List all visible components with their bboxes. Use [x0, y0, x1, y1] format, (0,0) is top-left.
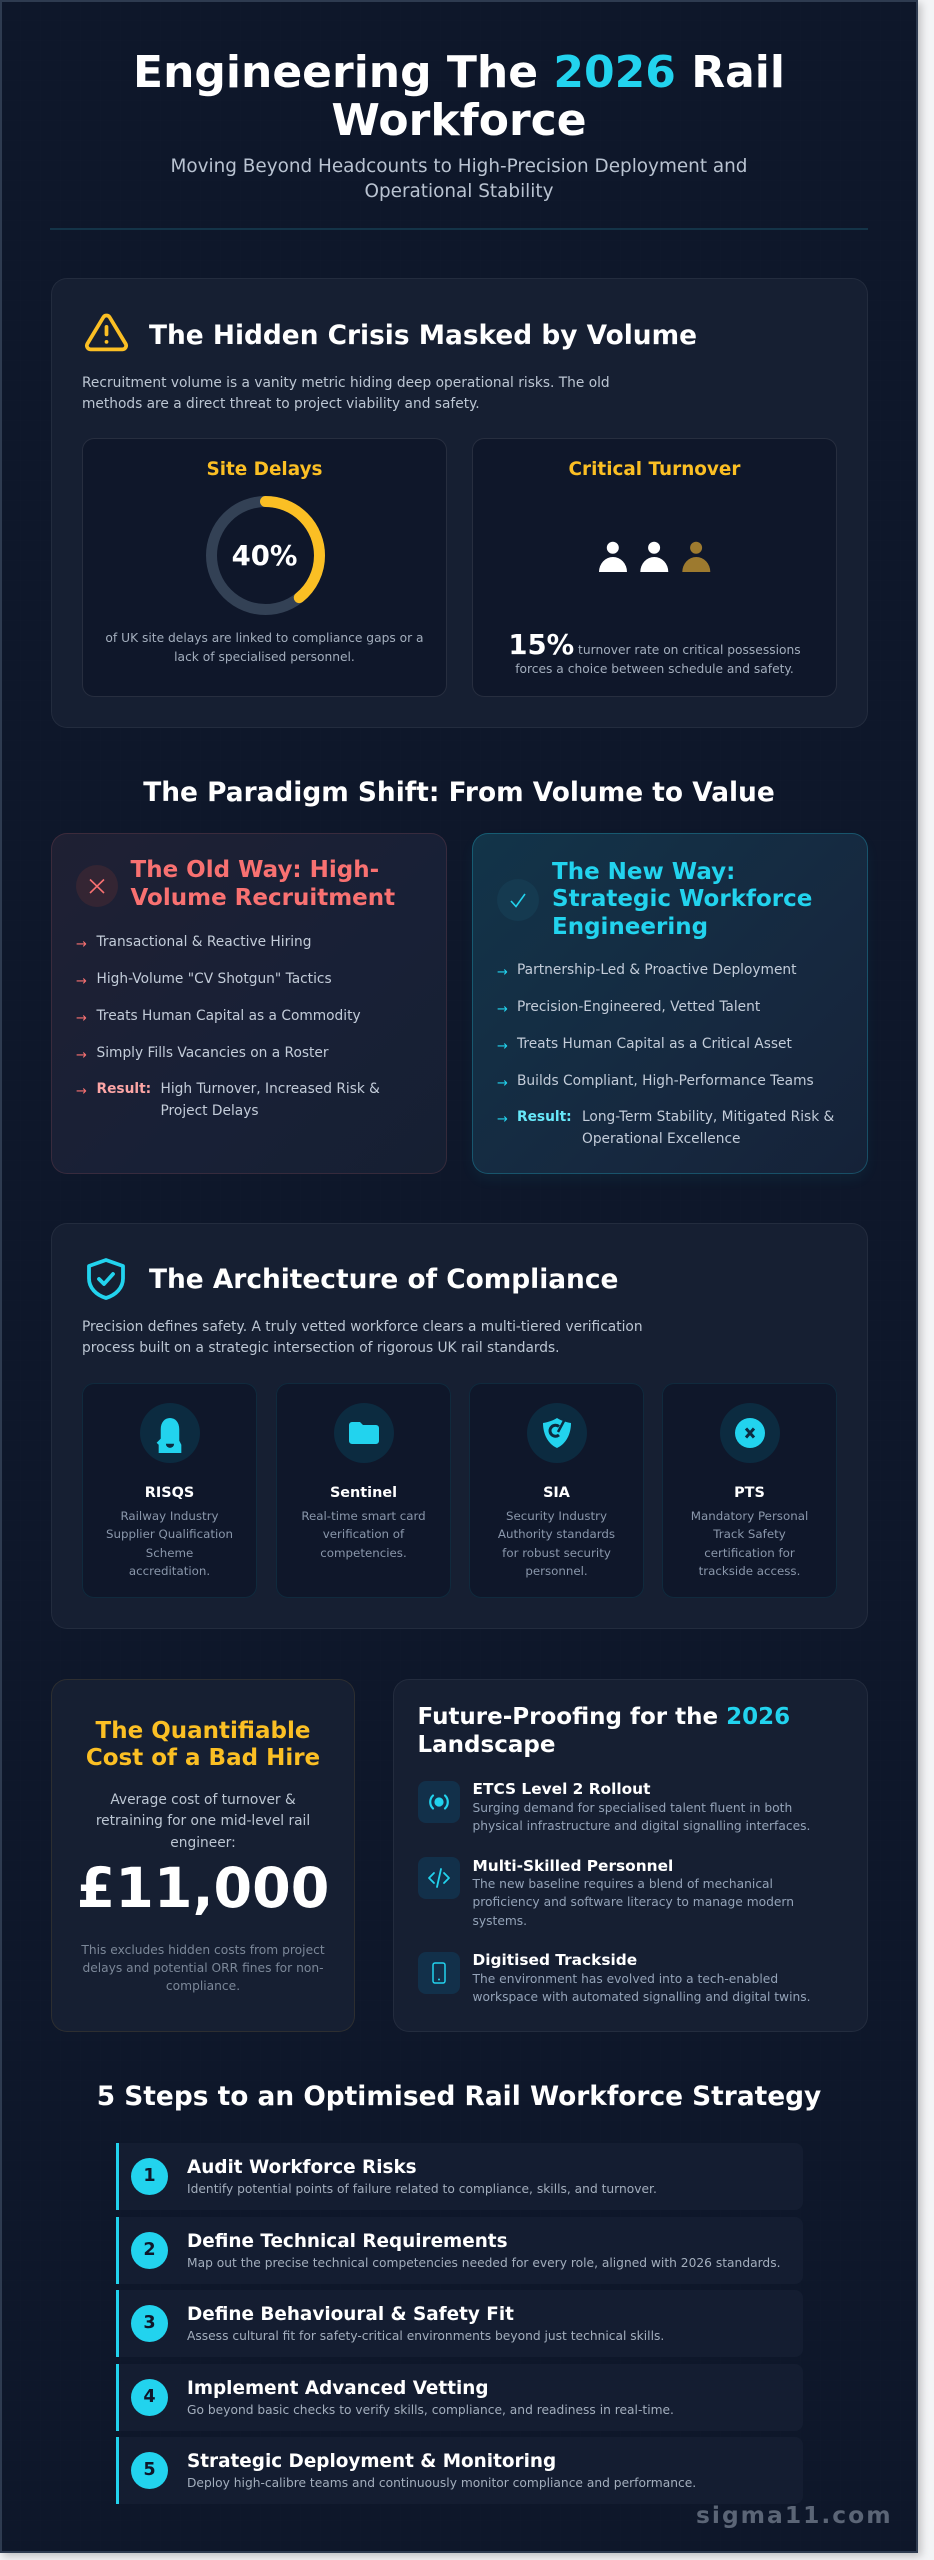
list: new way: →: [497, 1002, 508, 1017]
step 2 title: Define Technical Requirements: [187, 2230, 508, 2252]
caption: site delays: of UK site delays are linked to compliance gaps or a: [105, 631, 424, 645]
card: SIA: [469, 1383, 644, 1598]
description: PTS: [691, 1509, 808, 1578]
description: Sentinel: competencies.: [320, 1546, 407, 1560]
item: multi-skilled: [418, 1857, 794, 1928]
description: SIA: personnel.: [525, 1564, 588, 1578]
step 4 title: Implement Advanced Vetting: [187, 2378, 489, 2398]
description: RISQS: Supplier Qualification: [106, 1527, 233, 1541]
caption: turnover: forces a choice between schedule and safety.: [515, 662, 794, 676]
icon: shield badge: [526, 1403, 586, 1463]
arrow and result: Long-Term Stability, Mitigated Risk &: [582, 1109, 834, 1125]
heading: new way: Engineering: [552, 914, 708, 940]
card: RISQS: [82, 1383, 257, 1598]
card: site delays: [82, 438, 447, 697]
description: RISQS: Railway Industry: [120, 1509, 219, 1523]
description: RISQS: [106, 1509, 233, 1578]
number 5: [131, 2452, 168, 2489]
card: PTS: [662, 1383, 837, 1598]
caption: site delays: [105, 631, 424, 664]
subtitle: [170, 156, 747, 202]
list: old way: [76, 934, 380, 1119]
text: ETCS description: [472, 1801, 810, 1833]
number 4: 4: [143, 2386, 156, 2406]
step 4 description: Go beyond basic checks to verify skills, compliance, and readiness in real-time.: [187, 2402, 674, 2416]
title: [133, 47, 785, 146]
arrow and item 3: [76, 1008, 361, 1026]
description: Sentinel: [301, 1509, 426, 1560]
footnote: This excludes hidden costs from project: [81, 1942, 325, 1956]
footnote: [81, 1942, 325, 1993]
item: ETCS: [418, 1780, 810, 1833]
icon: tablet: [418, 1952, 460, 1994]
list: old way: →: [76, 1048, 87, 1062]
heading: cost: Cost of a Bad Hire: [86, 1745, 320, 1771]
stat: 15%: 15% turnover rate on critical possessions: [508, 629, 801, 661]
heading: cost: The Quantifiable: [96, 1718, 310, 1744]
heading: old way: Volume Recruitment: [130, 885, 395, 911]
intro text: [82, 374, 610, 412]
heading: future-proofing: Landscape: [418, 1732, 555, 1758]
title: Workforce: [331, 94, 587, 146]
heading: new way: Strategic Workforce: [552, 886, 812, 912]
heading: old way: [130, 857, 395, 911]
step 4: [116, 2364, 803, 2430]
text: multi-skilled title: Multi-Skilled Personnel: [472, 1857, 673, 1875]
panel: hidden crisis: [51, 278, 868, 728]
icon: cross: [76, 865, 118, 907]
subtitle: Moving Beyond Headcounts to High-Precision Deployment and: [170, 156, 747, 177]
arrow and item 4: [76, 1044, 329, 1062]
description: PTS: Track Safety: [713, 1527, 786, 1541]
icon: check: [498, 880, 539, 921]
number 3: 3: [143, 2313, 156, 2333]
description: average cost: engineer:: [170, 1835, 236, 1851]
heading: future-proofing: Future-Proofing for the 2026: [418, 1704, 790, 1730]
panel: cost of a bad hire: [51, 1679, 355, 2032]
title: Engineering The 2026 Rail: [133, 47, 785, 98]
arrow and result: Result:: [96, 1081, 151, 1097]
list: new way: →: [497, 965, 508, 980]
text: trackside description: workspace with automated signalling and digital twins.: [472, 1990, 811, 2004]
text: trackside title: Digitised Trackside: [472, 1951, 637, 1969]
label: Sentinel: Sentinel: [330, 1485, 397, 1501]
step 1 description: Identify potential points of failure related to compliance, skills, and turnover.: [187, 2182, 657, 2196]
arrow and result: [76, 1081, 380, 1119]
heading: compliance: The Architecture of Compliance: [149, 1264, 618, 1294]
icon: x in circle: [720, 1403, 780, 1463]
arrow and result: Result:: [517, 1109, 572, 1125]
label: SIA: SIA: [543, 1485, 570, 1501]
arrow and item 1: [497, 962, 797, 980]
icon: three people: [599, 542, 710, 572]
stat: 11,000 pounds: £11,000: [77, 1856, 329, 1920]
description: average cost: retraining for one mid-level rail: [96, 1813, 310, 1829]
arrow and result: →: [497, 1112, 508, 1127]
arrow and item 2: [497, 999, 760, 1017]
list: old way: →: [76, 974, 87, 989]
step 1 title: Audit Workforce Risks: [187, 2157, 417, 2178]
list: old way: Transactional & Reactive Hiring: [96, 934, 312, 950]
icon: folder: [334, 1403, 394, 1463]
description: RISQS: Scheme: [146, 1546, 193, 1560]
arrow and result: Operational Excellence: [582, 1131, 740, 1147]
description: PTS: trackside access.: [699, 1564, 800, 1578]
panel: architecture of compliance: [51, 1223, 868, 1629]
watermark: sigma11.com: [696, 2501, 893, 2529]
text: ETCS description: Surging demand for specialised talent fluent in both: [472, 1801, 792, 1815]
list: old way: High-Volume "CV Shotgun" Tactics: [96, 971, 332, 987]
list: new way: →: [497, 1038, 508, 1054]
description: SIA: Authority standards: [498, 1527, 615, 1541]
arrow and result: High Turnover, Increased Risk &: [160, 1081, 380, 1097]
panel: new way: [472, 833, 868, 1174]
donut chart: 40 percent: [206, 496, 325, 615]
text: trackside description: [472, 1972, 811, 2004]
number 4: [131, 2378, 168, 2416]
list: old way: Treats Human Capital as a Commodity: [96, 1008, 361, 1024]
list: old way: Simply Fills Vacancies on a Roster: [96, 1044, 329, 1060]
description: PTS: certification for: [704, 1546, 795, 1560]
number 5: 5: [143, 2460, 156, 2480]
text: multi-skilled description: systems.: [472, 1914, 527, 1928]
intro text: [82, 1318, 643, 1356]
number 2: [131, 2232, 168, 2268]
text: ETCS title: ETCS Level 2 Rollout: [472, 1780, 650, 1798]
step 3 title: Define Behavioural & Safety Fit: [187, 2304, 514, 2325]
icon: broadcast: [418, 1781, 460, 1823]
footnote: compliance.: [166, 1979, 240, 1993]
list: new way: Builds Compliant, High-Performance Teams: [517, 1072, 814, 1088]
label: PTS: PTS: [734, 1485, 765, 1501]
description: Sentinel: verification of: [323, 1527, 404, 1541]
item: digitised trackside: [418, 1951, 811, 2004]
arrow and result: Project Delays: [160, 1103, 259, 1119]
description: RISQS: accreditation.: [129, 1564, 210, 1578]
label: RISQS: RISQS: [145, 1485, 194, 1501]
icon: shield check: [87, 1258, 125, 1300]
step 2: [116, 2216, 803, 2284]
step 5: [116, 2437, 803, 2504]
caption: site delays: lack of specialised personnel.: [174, 650, 355, 664]
stat: 40%: 40%: [232, 540, 297, 572]
text: multi-skilled description: proficiency and software literacy to manage modern: [472, 1895, 794, 1909]
heading: cost: [86, 1718, 320, 1771]
card: Sentinel: [276, 1383, 451, 1598]
intro text: process built on a strategic intersection of rigorous UK rail standards.: [82, 1340, 560, 1356]
heading: hidden crisis: The Hidden Crisis Masked by Volume: [149, 320, 697, 350]
list: old way: →: [76, 1010, 87, 1026]
step 1: [116, 2143, 803, 2210]
heading: paradigm shift: The Paradigm Shift: From Volume to Value: [143, 777, 775, 808]
description: PTS: Mandatory Personal: [691, 1509, 808, 1523]
description: SIA: for robust security: [502, 1546, 611, 1560]
icon: code: [418, 1857, 460, 1899]
card: critical turnover: [472, 438, 837, 697]
subtitle: Operational Stability: [364, 181, 554, 202]
description: average cost: Average cost of turnover &: [110, 1792, 296, 1808]
description: SIA: [498, 1509, 615, 1578]
list: new way: [497, 962, 834, 1147]
description: average cost: [96, 1792, 310, 1851]
intro text: Precision defines safety. A truly vetted workforce clears a multi-tiered verification: [82, 1318, 643, 1334]
text: ETCS description: physical infrastructure and digital signalling interfaces.: [472, 1819, 810, 1833]
list: old way: →: [76, 937, 87, 952]
number 3: [131, 2305, 168, 2342]
list: new way: Treats Human Capital as a Critical Asset: [517, 1036, 792, 1052]
text: multi-skilled description: [472, 1877, 794, 1928]
arrow and result: →: [76, 1084, 87, 1099]
arrow and result: [497, 1109, 834, 1147]
icon: bell badge: [140, 1403, 200, 1463]
heading: new way: [552, 858, 812, 940]
arrow and item 3: [497, 1036, 792, 1054]
heading: old way: The Old Way: High-: [130, 857, 379, 883]
text: multi-skilled description: The new baseline requires a blend of mechanical: [472, 1877, 773, 1891]
step 5 title: Strategic Deployment & Monitoring: [187, 2451, 556, 2472]
intro text: Recruitment volume is a vanity metric hiding deep operational risks. The old: [82, 374, 610, 390]
icon: warning triangle: [84, 314, 128, 352]
list: new way: Precision-Engineered, Vetted Talent: [517, 999, 760, 1015]
step 2 description: Map out the precise technical competencies needed for every role, aligned with 2026 standards.: [187, 2256, 780, 2270]
step 5 description: Deploy high-calibre teams and continuously monitor compliance and performance.: [187, 2476, 696, 2490]
arrow and item 1: [76, 934, 312, 952]
number 1: 1: [143, 2166, 156, 2186]
arrow and item 4: [497, 1072, 814, 1090]
list: new way: Partnership-Led & Proactive Deployment: [517, 962, 797, 978]
intro text: methods are a direct threat to project viability and safety.: [82, 396, 480, 412]
number 1: [131, 2158, 168, 2195]
description: SIA: Security Industry: [506, 1509, 607, 1523]
heading: site delays: Site Delays: [206, 459, 323, 480]
heading: critical turnover: Critical Turnover: [569, 459, 740, 480]
footnote: delays and potential ORR fines for non-: [82, 1961, 324, 1975]
step 3: [116, 2290, 803, 2357]
number 2: 2: [143, 2240, 156, 2260]
arrow and item 2: [76, 971, 332, 989]
step 3 description: Assess cultural fit for safety-critical environments beyond just technical skills.: [187, 2329, 664, 2343]
text: trackside description: The environment has evolved into a tech-enabled: [472, 1972, 778, 1986]
list: new way: →: [497, 1076, 508, 1090]
panel: future-proofing: [393, 1679, 868, 2032]
heading: future-proofing: [418, 1704, 790, 1758]
panel: old way: [51, 833, 447, 1174]
description: Sentinel: Real-time smart card: [301, 1509, 426, 1523]
heading: five steps: 5 Steps to an Optimised Rail Workforce Strategy: [97, 2081, 821, 2112]
heading: new way: The New Way:: [552, 858, 735, 884]
